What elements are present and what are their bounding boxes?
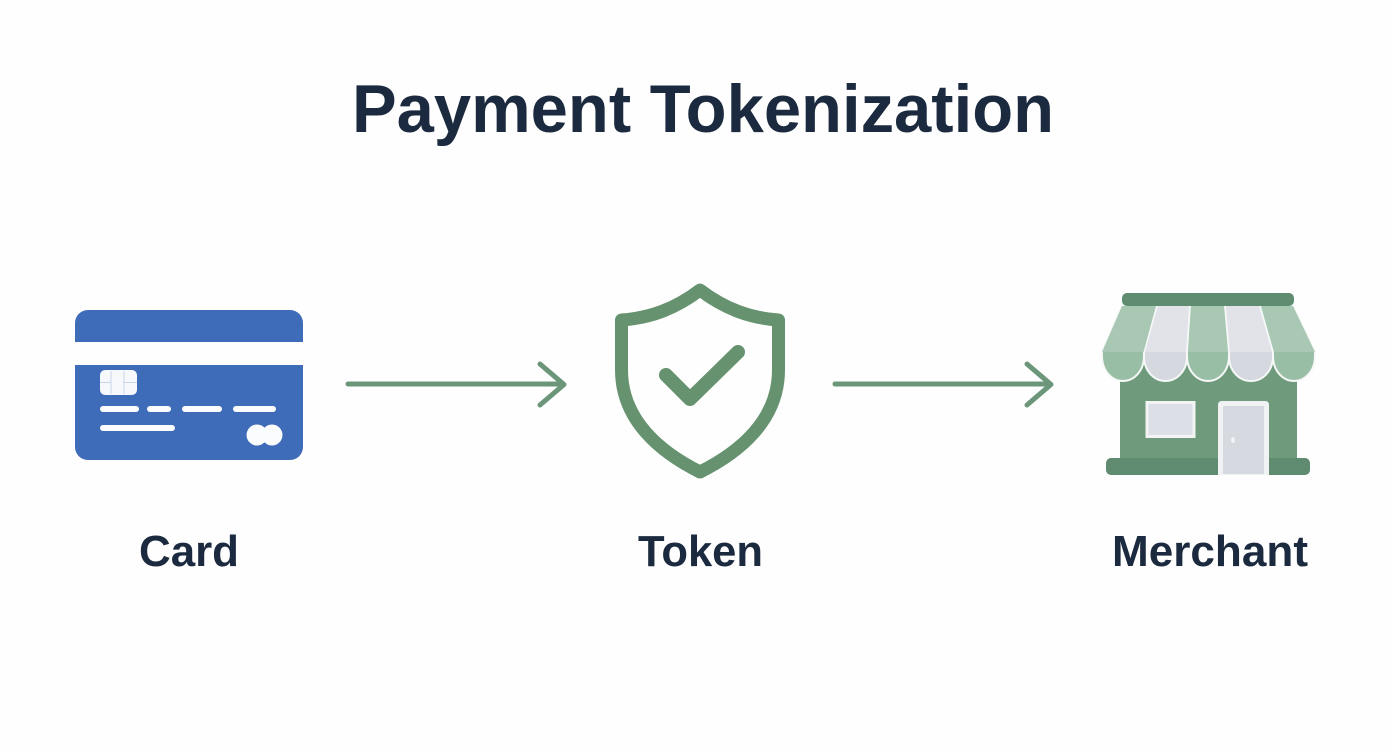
icon: shield with check <box>622 290 778 472</box>
label: merchant: Merchant <box>1112 527 1308 576</box>
label: card: Card <box>139 527 239 576</box>
arrow: token to merchant <box>835 364 1051 405</box>
icon: credit card <box>75 310 303 460</box>
title: Payment Tokenization <box>352 71 1054 147</box>
arrow: card to token <box>348 364 564 405</box>
icon: storefront <box>1102 293 1315 475</box>
label: token: Token <box>638 527 763 576</box>
